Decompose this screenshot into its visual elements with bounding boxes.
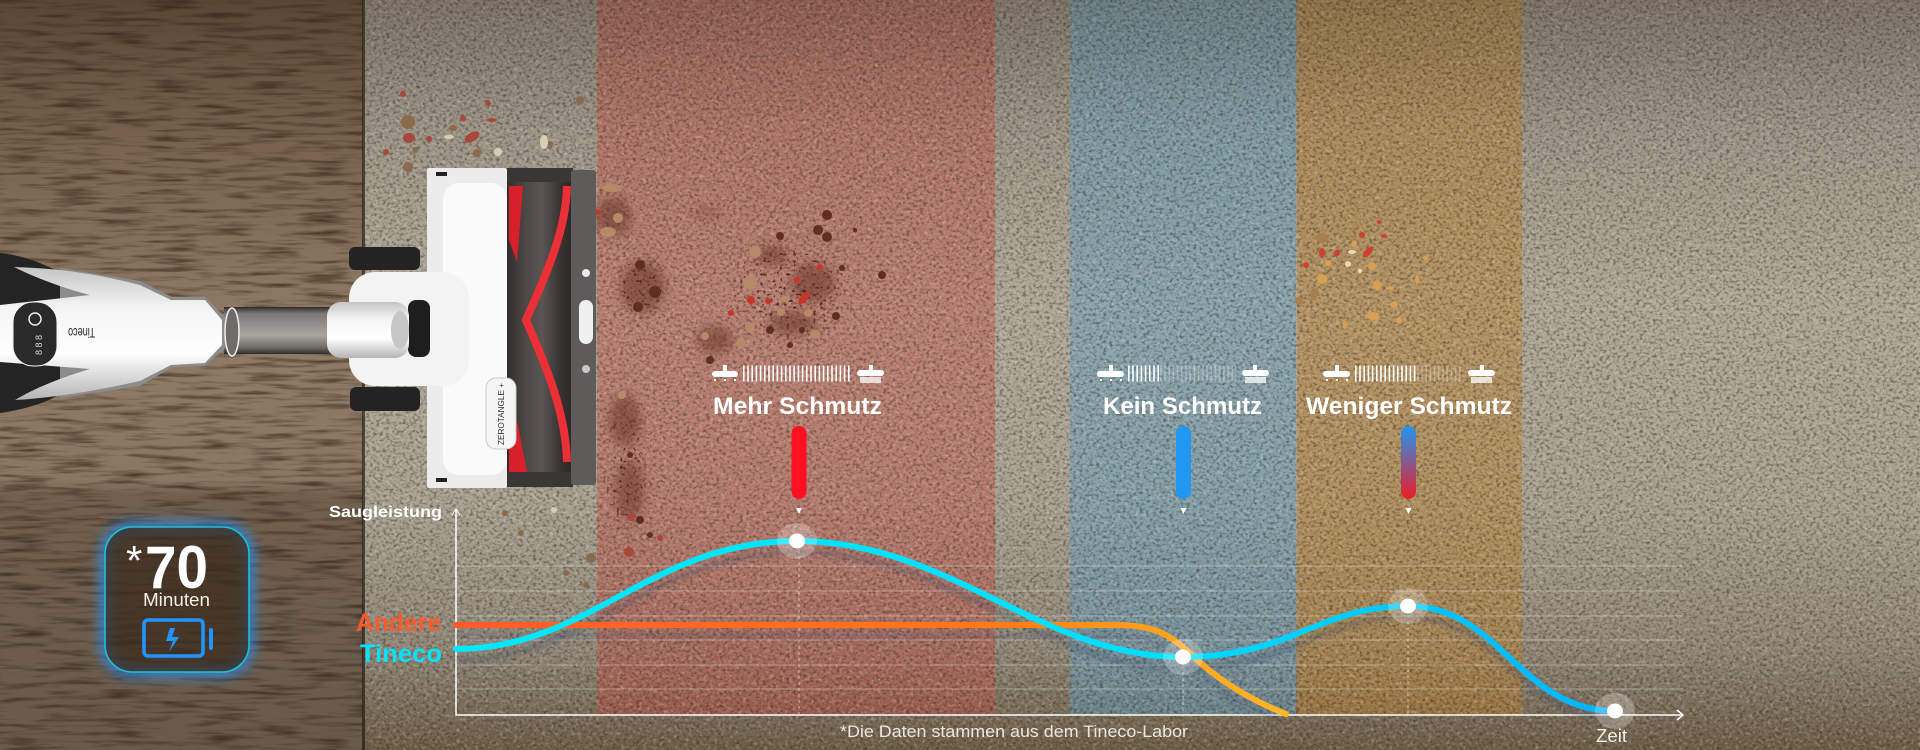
display oval xyxy=(13,302,57,366)
panel: orange zone less dirt xyxy=(1297,0,1522,715)
heading: Mehr Schmutz xyxy=(713,393,882,420)
side bar xyxy=(571,170,596,485)
pointer xyxy=(796,508,802,514)
panel: red zone more dirt xyxy=(597,0,995,715)
zone: Weniger Schmutz xyxy=(1306,365,1512,514)
label tag xyxy=(486,378,516,449)
series label: Tineco: Tineco xyxy=(360,640,442,668)
icon: suction scale xyxy=(1097,365,1269,383)
badge panel xyxy=(105,527,249,672)
heading: Kein Schmutz xyxy=(1103,393,1262,420)
dirt: carpet debris near nozzle xyxy=(383,91,663,588)
dirt smudges xyxy=(595,197,835,520)
pointer xyxy=(1406,508,1412,514)
vacuum cleaner xyxy=(0,168,596,488)
indicator bar xyxy=(1401,426,1416,499)
dirt particles xyxy=(594,184,886,538)
asterisk: * xyxy=(126,537,142,584)
y-axis label: Saugleistung xyxy=(329,504,442,521)
marker: peak xyxy=(777,523,817,559)
dirt specks xyxy=(598,230,861,534)
heading: Weniger Schmutz xyxy=(1306,393,1512,420)
indicator bar xyxy=(1176,426,1191,499)
x-axis label: Zeit xyxy=(1596,726,1627,746)
axes xyxy=(452,509,1683,720)
line: Andere xyxy=(456,625,1286,714)
power chart xyxy=(329,504,1683,746)
zone: Kein Schmutz xyxy=(1097,365,1269,514)
icon: suction scale xyxy=(712,365,884,383)
icon: suction scale xyxy=(1323,365,1495,383)
badge glow xyxy=(105,527,249,672)
series label: Andere: Andere xyxy=(356,609,441,637)
vacuum wheels xyxy=(349,247,420,411)
runtime unit: Minuten xyxy=(143,590,210,610)
dashed markers xyxy=(799,550,1408,714)
display readout: 888 xyxy=(34,335,44,355)
line: Tineco xyxy=(456,541,1615,711)
runtime value: 70 xyxy=(145,534,208,601)
pointer xyxy=(1180,508,1186,514)
panel: blue zone no dirt xyxy=(1070,0,1296,715)
icon: battery xyxy=(144,620,213,656)
zone: Mehr Schmutz xyxy=(712,365,884,514)
dirt: red debris xyxy=(596,184,886,538)
brush roll xyxy=(505,168,573,487)
battery badge xyxy=(105,527,249,672)
curve shadows xyxy=(456,552,1615,718)
marker: end xyxy=(1595,693,1635,729)
neck housing xyxy=(327,272,469,386)
handle body xyxy=(0,253,239,413)
vacuum tube xyxy=(224,307,366,354)
footnote: *Die Daten stammen aus dem Tineco-Labor xyxy=(840,722,1188,741)
label tag: ZEROTANGLE + xyxy=(497,383,506,445)
grid lines xyxy=(456,566,1683,689)
dirt: tan debris xyxy=(1295,220,1427,329)
brand logo: Tineco xyxy=(68,325,95,341)
marker: low xyxy=(1163,639,1203,675)
wood floor background xyxy=(0,0,365,750)
white nozzle plate xyxy=(427,168,507,488)
indicator bar xyxy=(792,426,806,499)
marker: mid xyxy=(1388,588,1428,624)
